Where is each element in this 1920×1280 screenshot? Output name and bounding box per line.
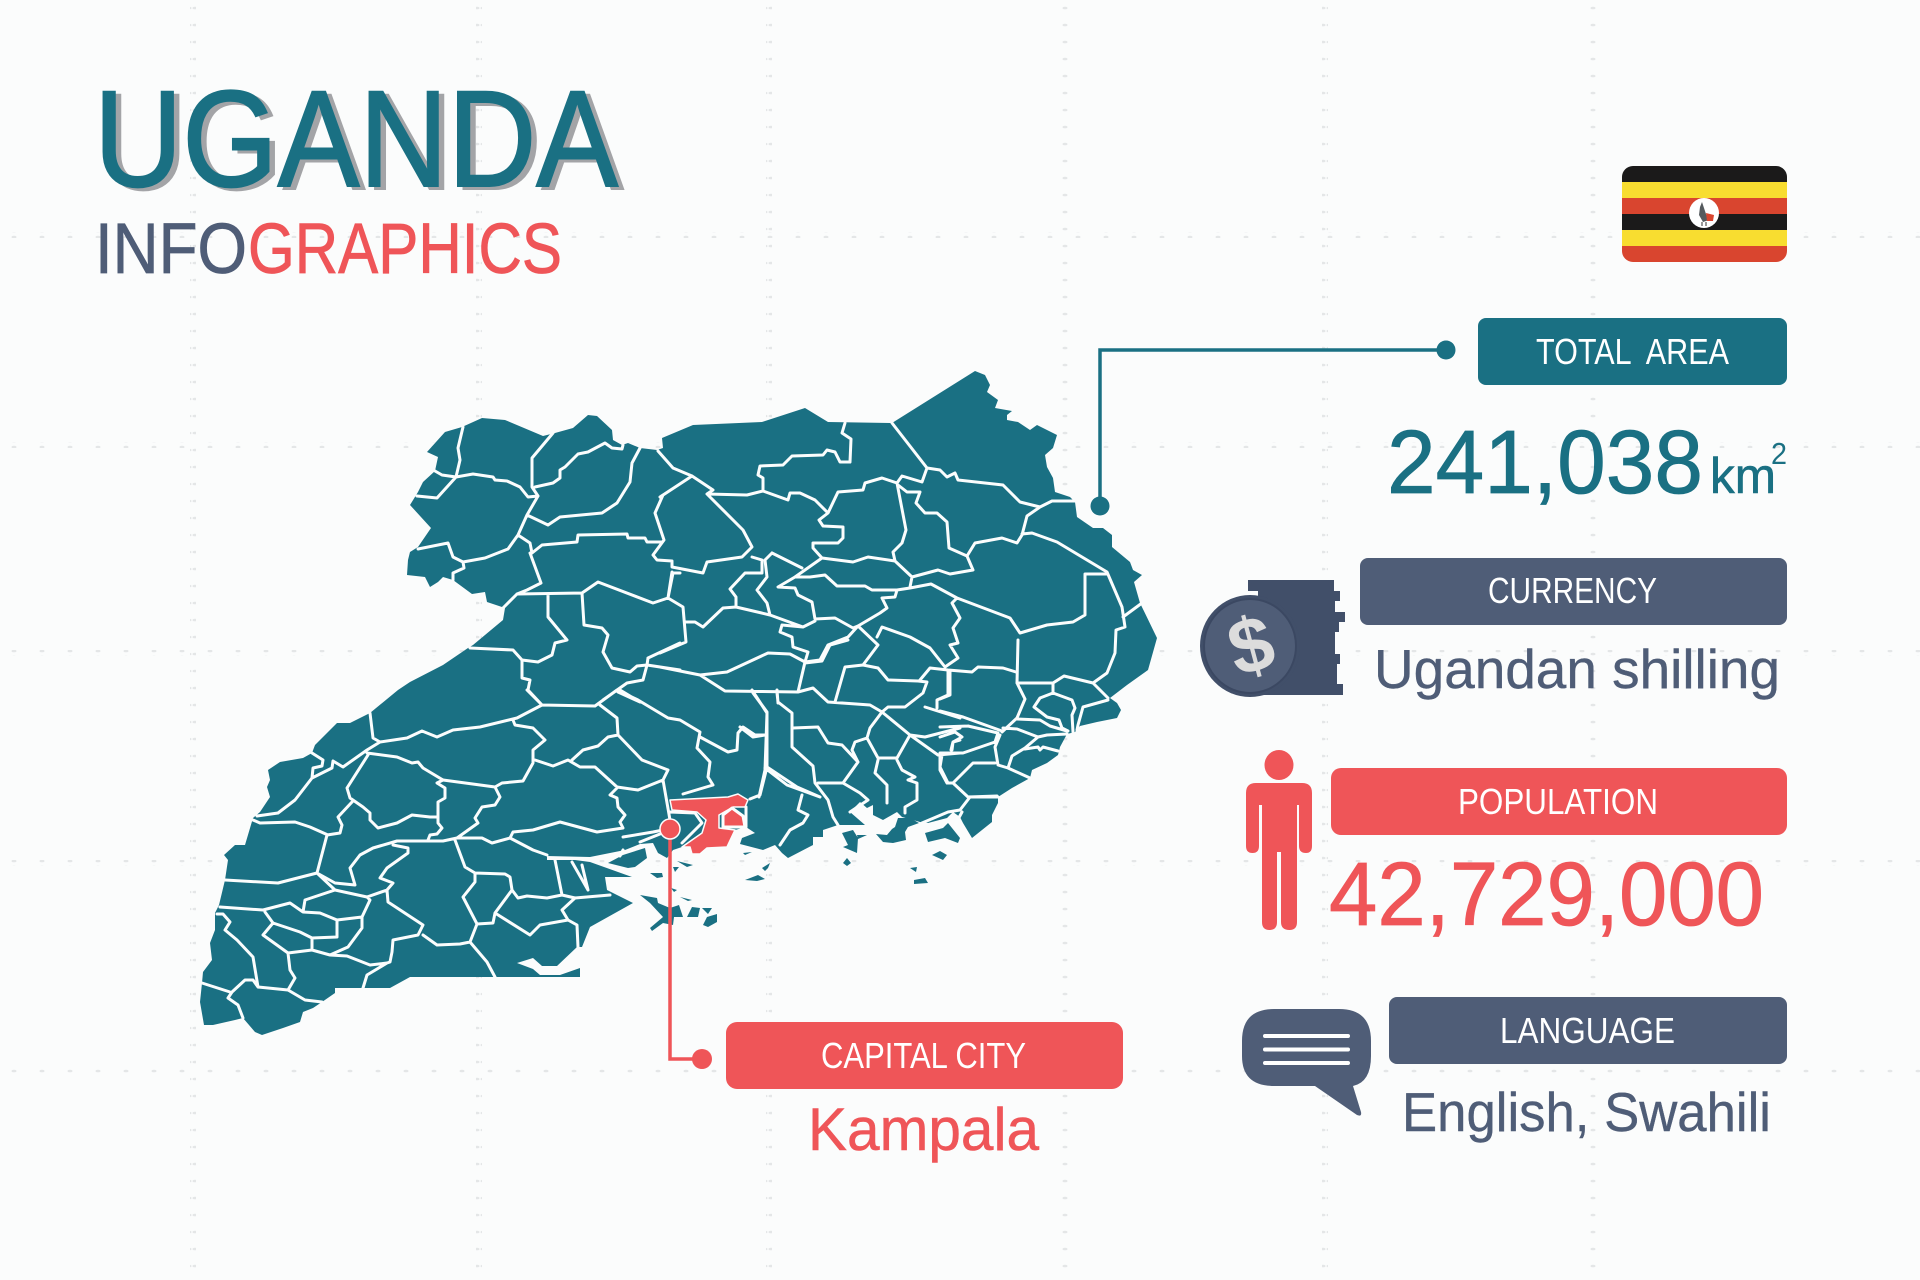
subtitle: INFOGRAPHICS xyxy=(95,210,562,289)
panel: total area xyxy=(1387,318,1787,513)
panel: population: POPULATION xyxy=(1458,781,1658,822)
panel: capital city: CAPITAL CITY xyxy=(821,1035,1026,1076)
panel: population: 42,729,000 xyxy=(1329,845,1764,945)
map outline xyxy=(200,371,1157,1035)
title: UGANDA: UGANDA xyxy=(94,63,619,216)
panel: capital city: Kampala xyxy=(808,1096,1040,1163)
callout line: capital city xyxy=(660,819,712,1069)
panel: population xyxy=(1329,768,1787,945)
map: Uganda districts xyxy=(200,371,1157,1035)
panel: total area: 2 xyxy=(1771,436,1787,471)
icon: coin stack: $ xyxy=(1219,597,1283,693)
panel: capital city xyxy=(726,1022,1123,1163)
panel: total area: 241,038 xyxy=(1387,413,1703,513)
panel: total area: TOTAL AREA xyxy=(1536,331,1729,372)
panel: currency: Ugandan shilling xyxy=(1374,638,1780,700)
callout line: total area xyxy=(1090,340,1456,516)
subtitle: INFOGRAPHICS: INFO xyxy=(95,210,247,289)
title: UGANDA: UGANDA xyxy=(100,66,624,219)
panel: currency: CURRENCY xyxy=(1488,570,1657,611)
panel: language: LANGUAGE xyxy=(1500,1010,1675,1051)
icon: Uganda flag xyxy=(1622,166,1787,262)
panel: language: English, Swahili xyxy=(1402,1081,1771,1143)
lake islands xyxy=(608,818,960,931)
panel: total area: km xyxy=(1710,448,1776,504)
panel: language xyxy=(1389,997,1787,1143)
icon: coin stack xyxy=(1200,580,1345,697)
subtitle: INFOGRAPHICS: GRAPHICS xyxy=(248,210,562,289)
district boundaries xyxy=(202,423,1142,1018)
Kampala highlighted region xyxy=(670,794,748,854)
icon: person xyxy=(1246,750,1312,930)
icon: speech bubble xyxy=(1242,1009,1371,1116)
panel: currency xyxy=(1360,558,1787,700)
